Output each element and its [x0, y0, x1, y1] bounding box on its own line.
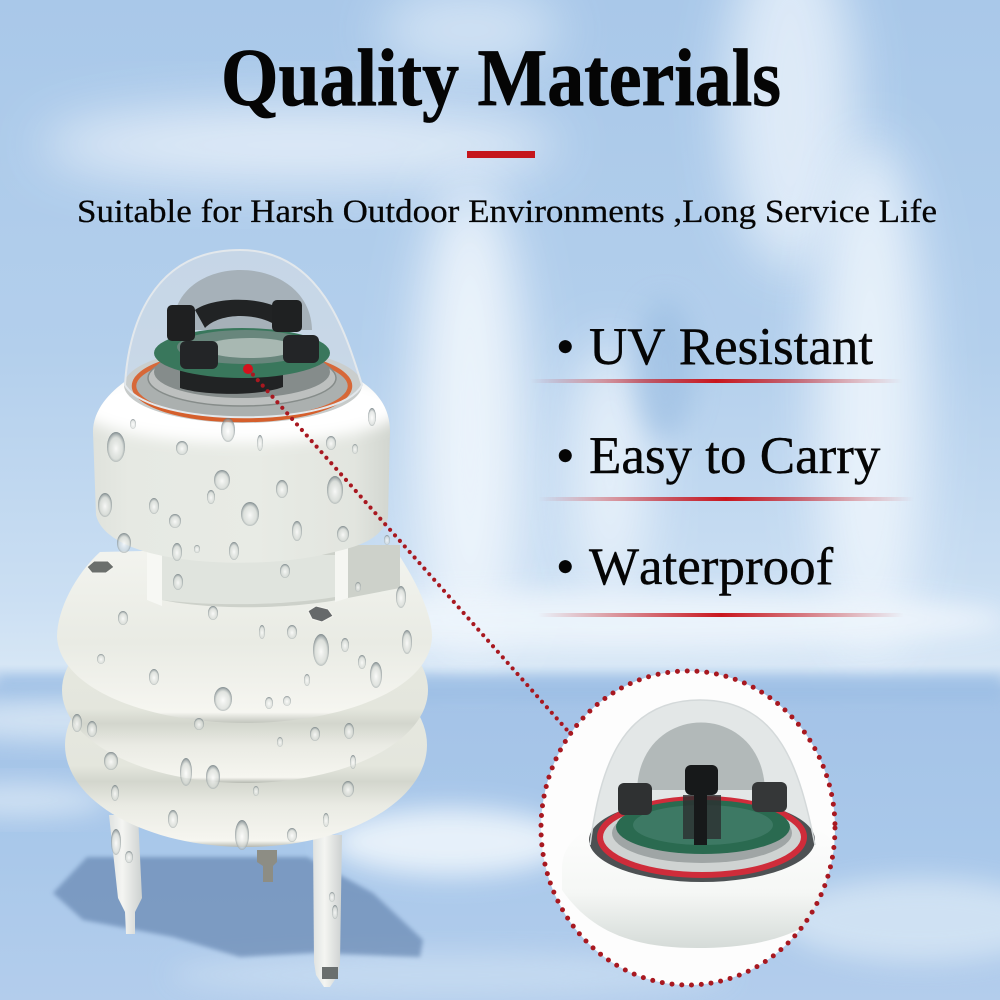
top louver	[57, 545, 432, 723]
dome base rim and orange gasket	[124, 347, 362, 423]
feature: Waterproof	[538, 538, 904, 617]
clear dome fill	[593, 700, 811, 828]
clear dome outline	[590, 700, 815, 845]
lower louvers	[65, 643, 427, 847]
mounting screws	[87, 561, 114, 573]
feature: Easy to Carry: Easy to Carry	[589, 427, 881, 485]
feature: Easy to Carry: •	[556, 427, 575, 485]
dotted leader line	[243, 364, 567, 730]
inner dome shell	[637, 722, 765, 790]
feature list	[530, 318, 914, 617]
circuit board	[616, 800, 790, 854]
feature: UV Resistant: UV Resistant	[589, 318, 873, 376]
white base	[565, 842, 834, 948]
dark rim and red gasket	[589, 811, 815, 882]
ground shadow	[53, 857, 423, 957]
clear dome fill	[125, 250, 362, 417]
callout: dome detail	[541, 671, 845, 985]
vent gap	[162, 545, 400, 607]
legs	[109, 815, 342, 987]
upper cylinder	[93, 375, 390, 563]
subtitle: Suitable for Harsh Outdoor Environments ,Long Service Life	[77, 194, 937, 230]
water droplets	[72, 408, 412, 919]
clear dome outline	[125, 250, 362, 417]
feature: UV Resistant: •	[556, 318, 575, 376]
black sensors	[618, 783, 652, 815]
feature: Waterproof: •	[556, 538, 575, 596]
sensor device	[57, 250, 432, 987]
title: Quality Materials	[221, 32, 781, 123]
circuit board	[154, 328, 330, 378]
dark sensor block	[180, 365, 283, 394]
inner dome shell	[173, 270, 312, 330]
feature: UV Resistant	[530, 318, 902, 383]
title accent bar	[467, 151, 535, 158]
feature: Waterproof: Waterproof	[589, 538, 834, 596]
black sensors	[195, 300, 285, 328]
feature: Easy to Carry	[538, 427, 914, 501]
